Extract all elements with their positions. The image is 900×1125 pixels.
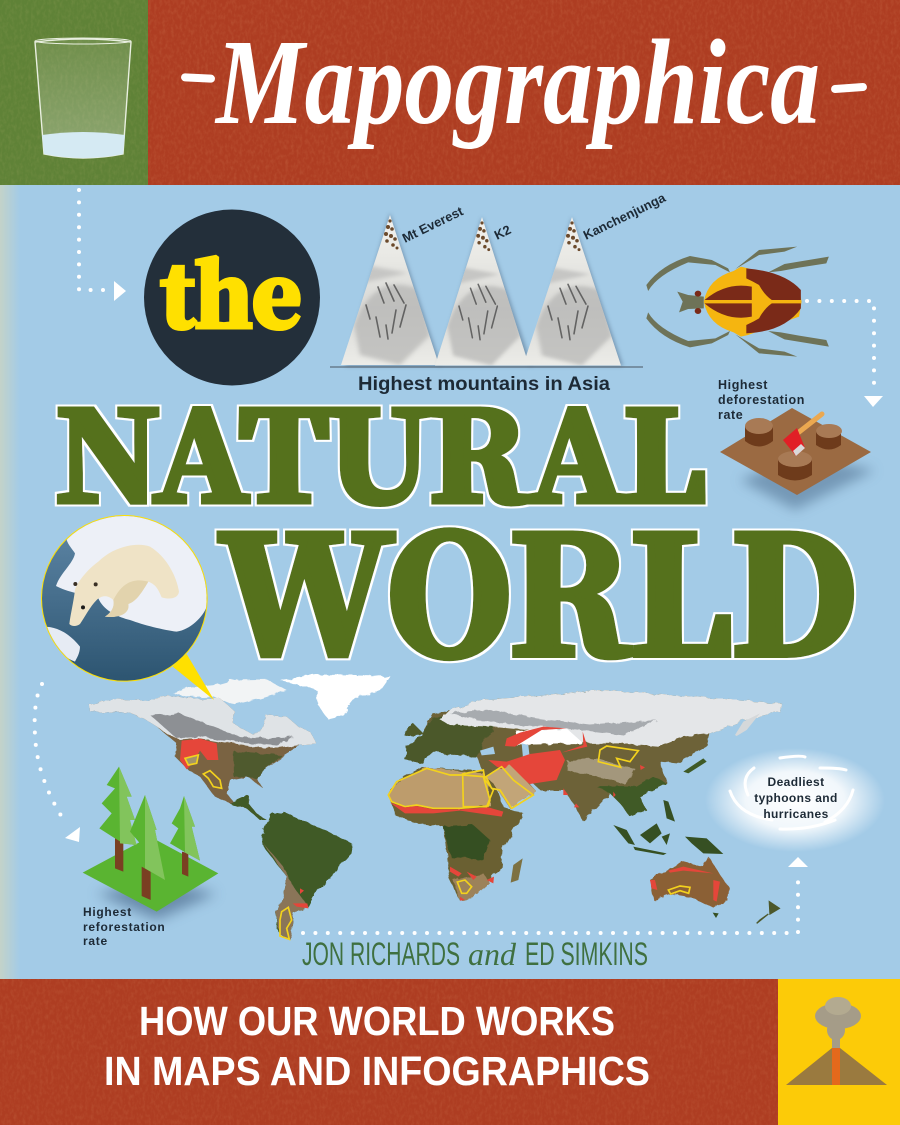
red dryland zone: southern Africa <box>450 867 494 901</box>
Indonesia, Philippines and New Guinea <box>613 800 723 855</box>
caption: Highest mountains in Asia <box>358 374 610 395</box>
header red band <box>148 0 900 185</box>
callout: polar bear photo <box>40 513 214 700</box>
typhoon cloud: Deadliest <box>768 775 824 789</box>
yellow outlines: Arabian deserts <box>463 767 533 808</box>
label: highest reforestation rate: rate <box>83 934 108 948</box>
mountain: Mt Everest: Mt Everest <box>400 203 466 246</box>
red band: Sahel <box>390 803 503 817</box>
footer tagline: IN MAPS AND INFOGRAPHICS <box>104 1048 650 1094</box>
icon: deforestation board <box>720 408 875 510</box>
New Zealand <box>757 902 779 923</box>
yellow outline: Sahara <box>388 768 490 808</box>
dotted arrow: glass to the <box>79 190 126 301</box>
footer tagline: HOW OUR WORLD WORKS <box>139 998 615 1044</box>
yellow outline: Gobi <box>598 746 638 767</box>
label: highest reforestation rate <box>83 905 165 948</box>
red dryland zone: South America <box>293 888 308 908</box>
label: highest deforestation rate: deforestation <box>718 393 805 407</box>
mountain: Mt Everest <box>341 203 466 366</box>
UK and Ireland <box>404 723 425 736</box>
red dryland zone: Central Asia <box>488 727 645 807</box>
yellow outline: Great Basin <box>185 755 198 765</box>
Madagascar <box>511 858 523 883</box>
typhoon cloud <box>705 748 885 852</box>
dotted arrow: polar bear to forest <box>35 684 80 842</box>
footer red band <box>0 979 778 1125</box>
red dryland zone: western USA <box>180 739 218 769</box>
label: highest deforestation rate <box>718 378 805 422</box>
dotted arrow: beetle to deforestation <box>807 301 883 407</box>
dotted arrow: map to typhoon <box>303 857 808 933</box>
Sakhalin and Kamchatka <box>735 713 760 736</box>
label: highest deforestation rate: Highest <box>718 378 768 392</box>
South America <box>262 812 352 940</box>
mountain: K2: K2 <box>492 222 513 243</box>
yellow outline: Chihuahuan desert <box>203 771 222 788</box>
Japan <box>683 758 707 773</box>
icon: volcano <box>786 997 887 1085</box>
authors: JON RICHARDS <box>302 936 460 972</box>
heading: WORLD: WORLD <box>219 470 857 700</box>
yellow outline: Great Victoria desert <box>668 886 690 894</box>
mountain: Kanchenjunga <box>523 190 669 366</box>
icon: glass of water <box>35 38 131 158</box>
Black Sea and Caspian Sea <box>480 743 530 762</box>
Tasmania <box>713 913 719 918</box>
North America <box>89 696 317 820</box>
badge: the <box>144 210 320 386</box>
label: highest deforestation rate: rate <box>718 408 743 422</box>
Africa <box>388 768 523 901</box>
Canadian arctic islands <box>173 679 287 705</box>
label: highest reforestation rate: Highest <box>83 905 132 919</box>
polar bear <box>69 545 179 626</box>
footer tagline <box>104 998 650 1094</box>
icon: reforestation trees <box>83 767 218 920</box>
mountain: Kanchenjunga: Kanchenjunga <box>581 190 669 243</box>
heading: NATURAL: NATURAL <box>56 361 706 536</box>
typhoon cloud: typhoons and <box>754 791 838 805</box>
header green panel <box>0 0 148 185</box>
red dryland zone: Australia <box>650 867 720 902</box>
chart: highest mountains in Asia <box>330 190 669 395</box>
yellow outline: Kalahari <box>457 880 472 893</box>
typhoon cloud: hurricanes <box>763 807 829 821</box>
mountain: K2 <box>435 217 532 366</box>
yellow outline: Patagonia <box>280 907 292 939</box>
label: highest reforestation rate: reforestation <box>83 920 165 934</box>
Greenland <box>280 675 390 719</box>
world map <box>89 675 782 940</box>
Australia <box>650 857 728 908</box>
footer yellow panel <box>778 979 900 1125</box>
authors: ED SIMKINS <box>525 936 648 972</box>
authors: and <box>468 936 517 972</box>
authors <box>302 936 648 972</box>
Eurasia <box>405 690 782 923</box>
badge: the: the <box>161 231 301 352</box>
icon: beetle <box>646 247 829 357</box>
Arabian Peninsula <box>485 765 537 808</box>
